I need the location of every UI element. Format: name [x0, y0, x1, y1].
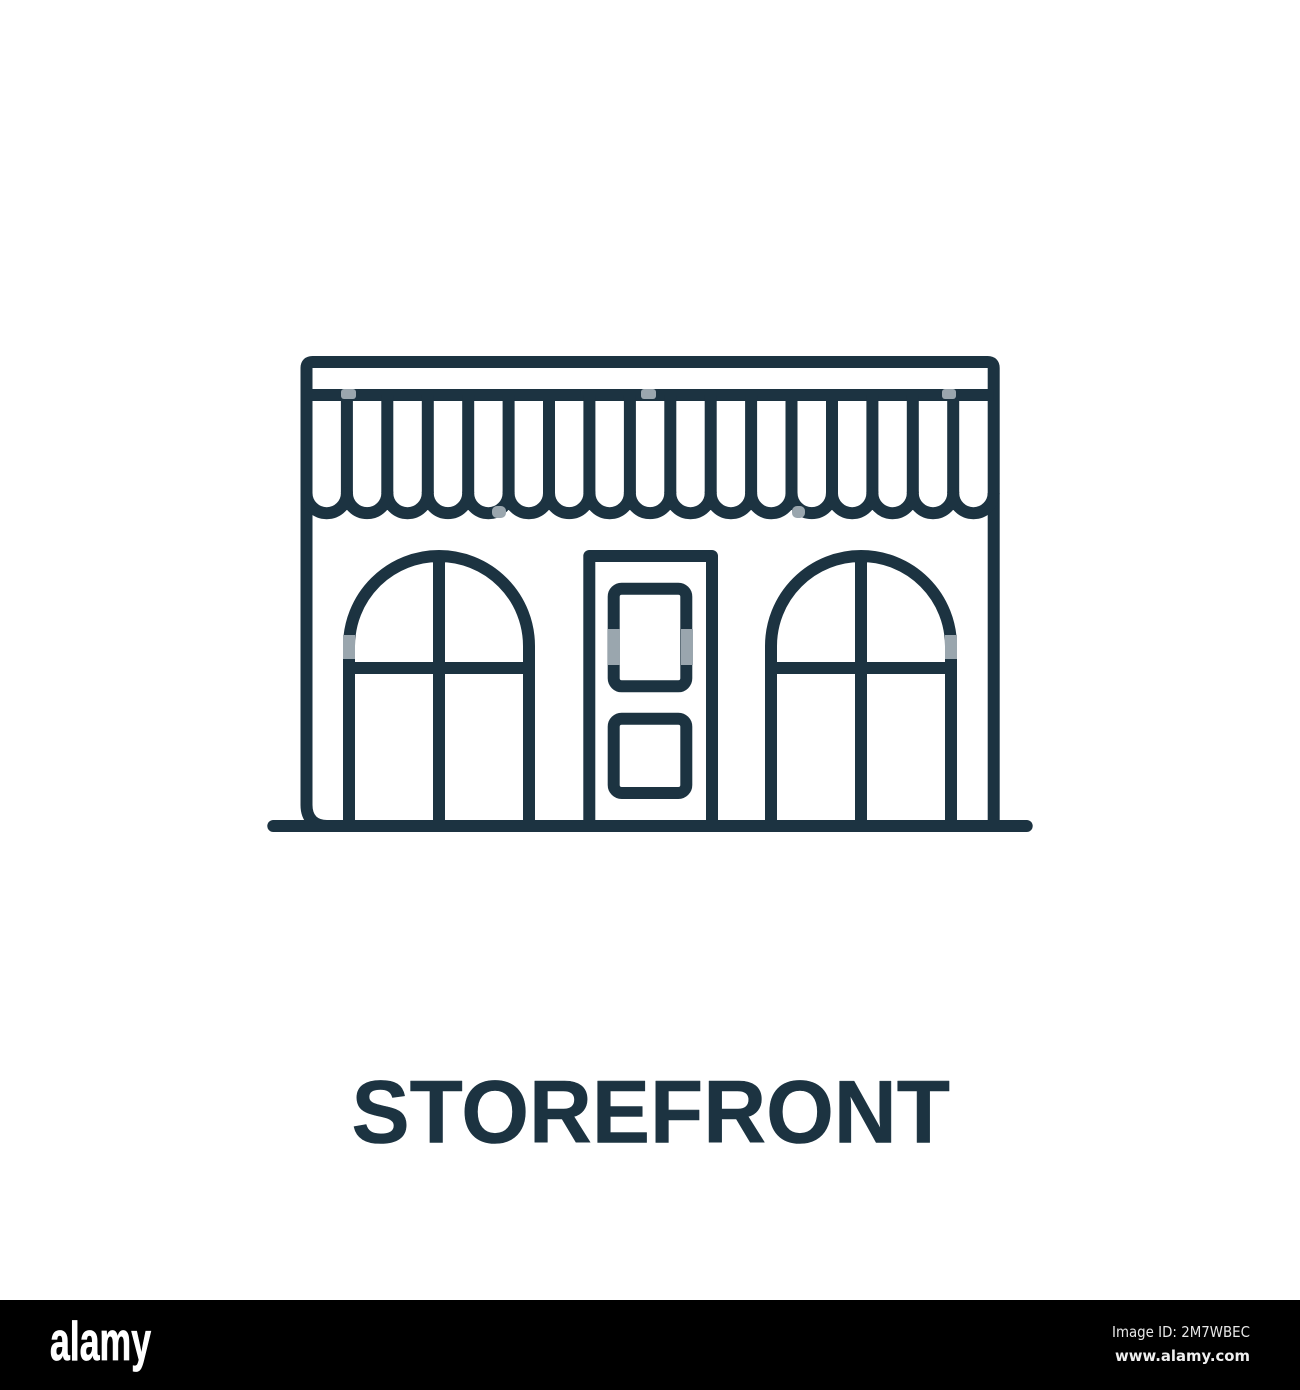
door lower panel [614, 719, 686, 793]
footer bar [0, 1300, 1300, 1390]
watermark fragments [341, 389, 957, 665]
awning stripes [347, 395, 953, 493]
title: STOREFRONT [352, 1062, 950, 1162]
door [589, 556, 712, 826]
website: www.alamy.com [1115, 1347, 1250, 1365]
awning top bar [306, 389, 994, 401]
right arched window [771, 556, 951, 826]
footer logo: alamy [50, 1310, 151, 1372]
awning scallops [306, 493, 994, 513]
ground line [273, 820, 1027, 832]
image id: Image ID: 2M7WBEC [1112, 1323, 1250, 1341]
building frame [306, 362, 994, 826]
left arched window [349, 556, 529, 826]
door upper panel [614, 589, 686, 686]
icon: storefront [273, 362, 1027, 826]
